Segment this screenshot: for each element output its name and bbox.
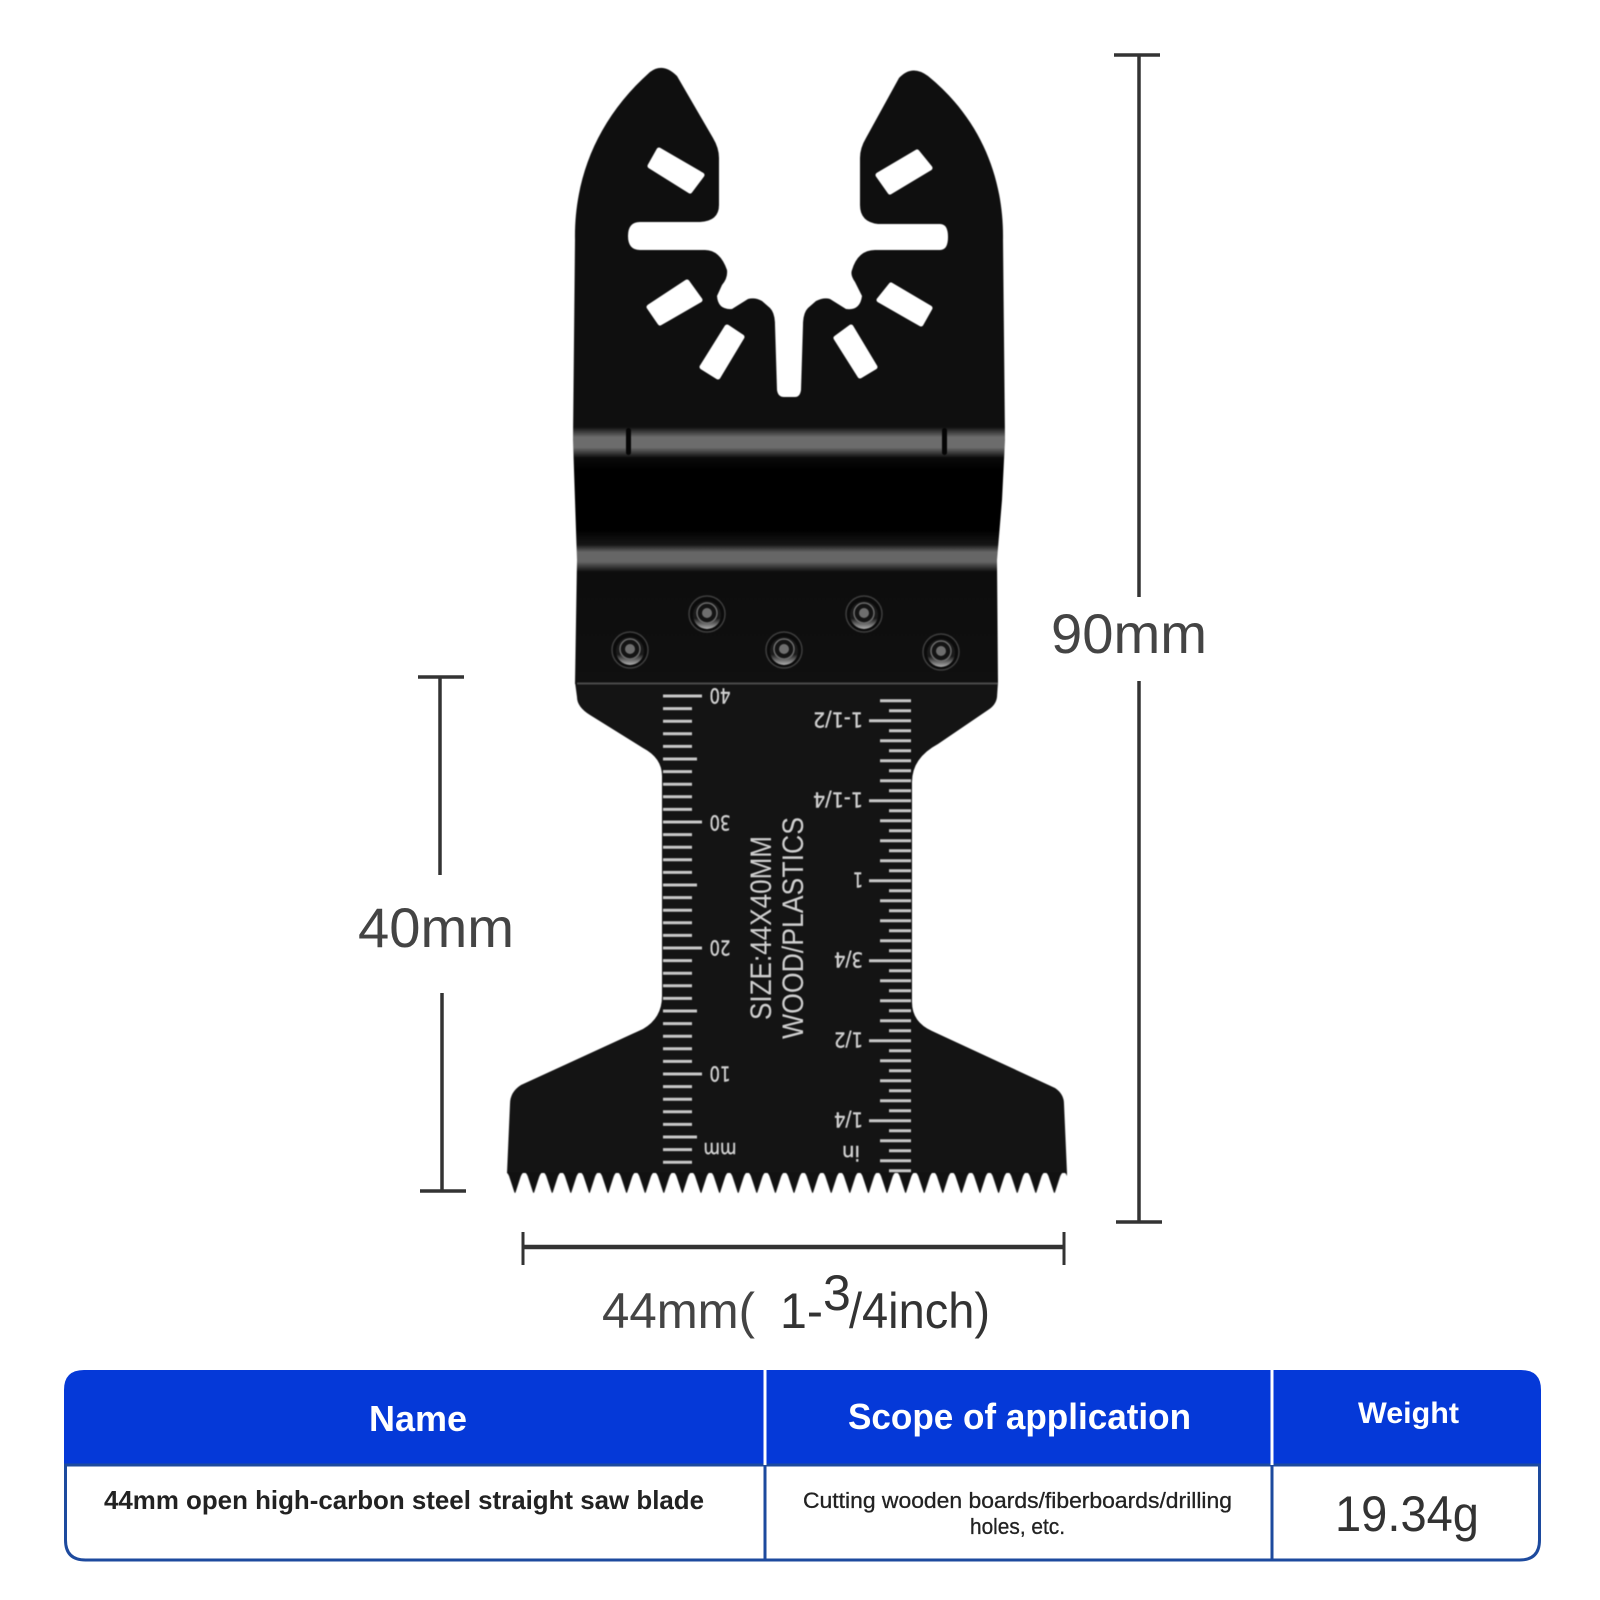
dimension: 44mm width: 1- (780, 1283, 823, 1339)
column dividers (765, 1370, 1272, 1465)
blade engraving (745, 817, 810, 1039)
dimension: 90mm height (1051, 55, 1207, 1222)
saw blade (507, 68, 1067, 1196)
table header band (64, 1370, 1541, 1465)
ruler labels: in (842, 1141, 860, 1165)
dimension: 40mm height: 40mm (358, 896, 514, 959)
dimension: 40mm height (358, 677, 514, 1191)
dimension: 44mm width: 3 (823, 1265, 851, 1321)
seam line (577, 682, 998, 684)
millimetre ruler (663, 696, 702, 1162)
saw teeth (507, 1172, 1067, 1196)
blade engraving: WOOD/PLASTICS (777, 817, 810, 1039)
blade engraving: SIZE:44X40MM (745, 836, 778, 1020)
ruler labels: 30 (710, 810, 730, 834)
ruler labels: 20 (710, 936, 730, 960)
ruler labels: 1/2 (834, 1028, 863, 1052)
ruler labels: 1-1/2 (813, 708, 863, 732)
bend notches (626, 428, 947, 455)
cell: product name: 44mm open high-carbon steel straight saw blade (104, 1485, 704, 1515)
ruler labels: 3/4 (834, 948, 863, 972)
cell: application: Cutting wooden boards/fiberboards/drilling (803, 1488, 1232, 1513)
ruler labels: 1 (853, 868, 863, 892)
rivets (612, 596, 959, 670)
cell: application (803, 1488, 1232, 1539)
ruler labels: 10 (710, 1062, 730, 1086)
header: weight: Weight (1358, 1397, 1459, 1430)
dimension: 44mm width (523, 1232, 1064, 1339)
cell: weight value: 19.34g (1335, 1486, 1479, 1542)
dimension: 44mm width: /4inch) (849, 1283, 990, 1339)
blade mounting plate with star slot (573, 68, 1005, 684)
table body outline (66, 1465, 1540, 1560)
ruler labels: 40 (710, 684, 730, 708)
header: name: Name (369, 1398, 467, 1439)
ruler labels (704, 684, 863, 1165)
ruler labels: mm (704, 1138, 736, 1162)
blade body (507, 682, 1067, 1173)
ruler labels: 1/4 (834, 1108, 863, 1132)
ruler labels: 1-1/4 (813, 788, 863, 812)
inch ruler (869, 701, 911, 1171)
dimension: 44mm width: 44mm( (602, 1283, 755, 1339)
header: scope: Scope of application (848, 1396, 1191, 1437)
cell: application: holes, etc. (970, 1514, 1065, 1539)
specification table (64, 1370, 1541, 1560)
mounting holes (649, 150, 930, 377)
dimension: 90mm height: 90mm (1051, 602, 1207, 665)
